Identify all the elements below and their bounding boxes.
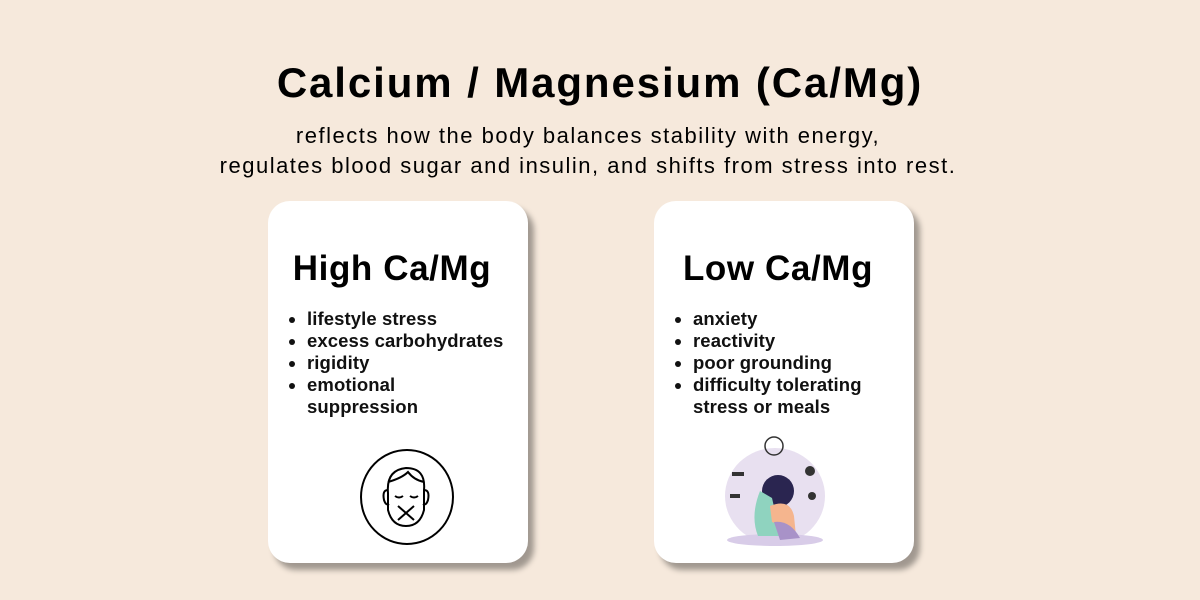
list: high: emotional: [307, 374, 395, 395]
subtitle: regulates blood sugar and insulin, and shifts from stress into rest.: [220, 153, 956, 178]
list: high: rigidity: [307, 352, 369, 373]
heading: low: Low Ca/Mg: [683, 249, 873, 288]
subtitle: [220, 123, 956, 178]
list: low: anxiety: [693, 308, 757, 329]
list: high: lifestyle stress: [307, 308, 437, 329]
icon: silenced face: [360, 449, 454, 545]
list: high: suppression: [307, 396, 418, 417]
list: high: excess carbohydrates: [307, 330, 503, 351]
list: low: difficulty tolerating: [693, 374, 862, 395]
list: low: poor grounding: [693, 352, 832, 373]
panel: low Ca/Mg: [654, 201, 914, 563]
icon: anxious person: [725, 436, 825, 546]
panel: high Ca/Mg: [268, 201, 528, 563]
list: low: stress or meals: [693, 396, 830, 417]
subtitle: reflects how the body balances stability with energy,: [296, 123, 880, 148]
list: high: [289, 308, 503, 417]
title: Calcium / Magnesium (Ca/Mg): [277, 59, 923, 106]
list: low: [675, 308, 862, 417]
heading: high: High Ca/Mg: [293, 249, 491, 288]
list: low: reactivity: [693, 330, 775, 351]
